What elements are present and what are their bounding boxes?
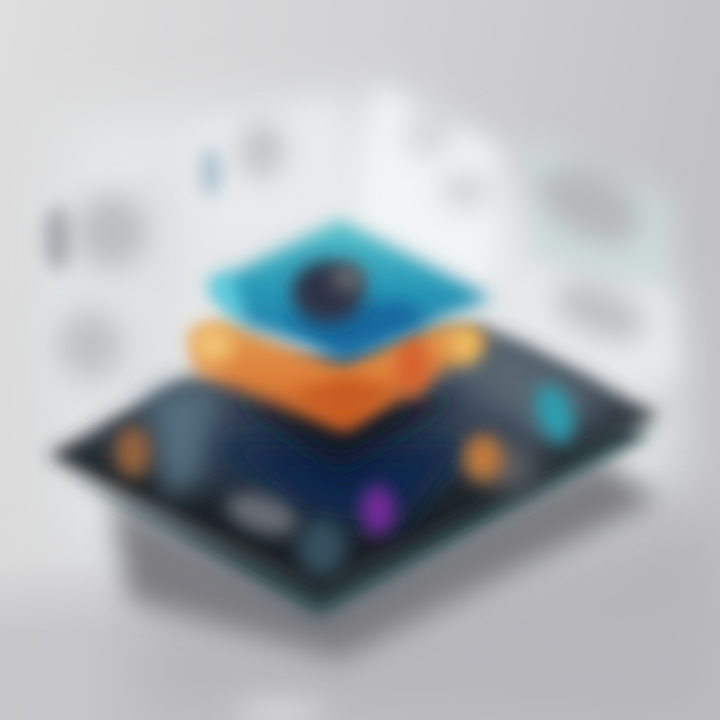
tablet edge glow [70,415,650,618]
circle highlight [332,264,364,292]
screen teal lower highlight [298,520,346,576]
tablet body [48,325,660,600]
tablet screen [100,345,610,545]
icon: dark grey [44,206,72,270]
orange left highlight [193,327,233,363]
orange deep tip [290,375,400,425]
screen slate highlight left [150,385,215,500]
orange right highlight [449,325,481,365]
orange red-tinted band [395,333,429,397]
screen navy centre [215,440,465,525]
label: grey bar [222,486,302,542]
icon: grey patch right [486,442,538,494]
icon: orange right [463,434,503,482]
blue diamond [210,220,492,358]
card sheet [190,100,350,240]
dark blue shade [285,300,430,355]
icon: orange left [115,426,151,478]
orange chevron [190,320,490,432]
floating card: right [526,140,670,300]
icon: blue [201,148,221,196]
icon: purple [361,485,395,535]
card sheet [40,165,190,350]
tablet drop shadow [110,460,660,660]
icon: grey [240,122,284,178]
floating card: lower right [520,270,680,380]
screen slate highlight upper right [480,345,600,440]
orange layer shadow [225,395,465,470]
orange layer [190,320,490,470]
floating card: upper left with blue icon [190,100,350,240]
blue layer [208,220,492,358]
tablet device [48,325,660,618]
floating card: far left [40,165,190,350]
icon: teal [530,380,580,448]
dark circle [292,261,364,323]
icon: light grey [76,196,148,268]
floating card: top centre [350,85,500,290]
cyan left edge [208,270,245,318]
floating card: lower left [35,290,180,420]
